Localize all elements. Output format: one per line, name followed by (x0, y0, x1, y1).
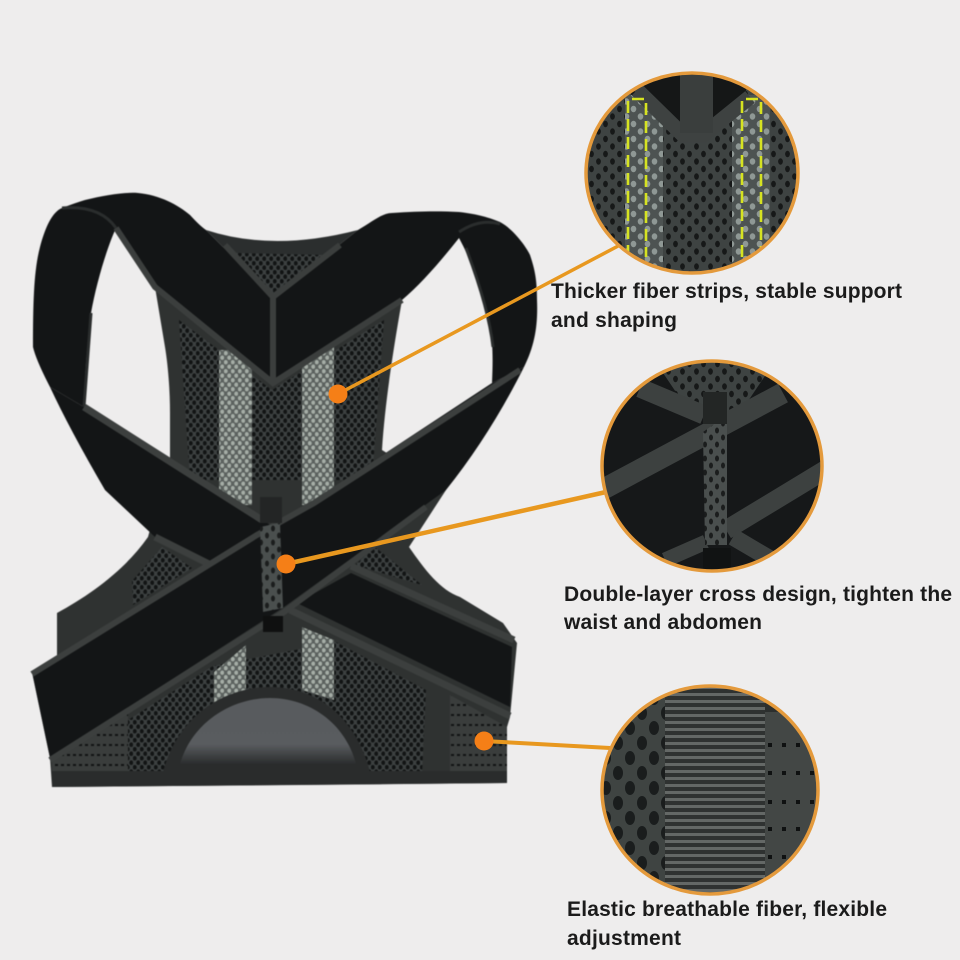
caption 1: Thicker fiber strips, stable support (551, 280, 902, 303)
caption 3: Elastic breathable fiber, flexible (567, 898, 887, 921)
shoulder trim (116, 228, 402, 383)
lower mesh (128, 642, 426, 774)
torso mesh (179, 320, 384, 480)
caption 3 (567, 898, 887, 950)
bottom hem (52, 771, 507, 787)
right elastic side panel (450, 695, 507, 775)
callout line 2 (286, 492, 606, 564)
cross band left upper (50, 387, 300, 562)
posture corrector vest (32, 193, 537, 787)
strap inner seam (62, 208, 500, 407)
callout line 3 (484, 741, 610, 748)
vest body (32, 287, 517, 787)
caption 2: waist and abdomen (563, 611, 762, 634)
detail circle 1: thicker fiber strips (580, 70, 805, 280)
band trim (84, 407, 514, 716)
left grey support strip (219, 350, 252, 505)
left side mesh (132, 547, 192, 605)
right shoulder strap and pad (273, 211, 537, 385)
band crossing trim (32, 370, 520, 760)
lumbar pad (163, 687, 370, 772)
center loop (260, 497, 283, 632)
neck mesh (206, 230, 358, 297)
caption 1 (551, 280, 902, 332)
left shoulder strap and pad (33, 193, 273, 407)
lower right grey strip (302, 627, 334, 700)
caption 3: adjustment (567, 927, 681, 950)
lower left grey strip (214, 645, 246, 712)
marker dot 1 (328, 384, 348, 404)
cross band right lower (297, 573, 512, 707)
cross band over (32, 367, 524, 758)
caption 2: Double-layer cross design, tighten the (564, 583, 952, 606)
caption 1: and shaping (551, 309, 677, 332)
detail circle 3: elastic fiber (598, 682, 823, 897)
right side mesh (355, 547, 422, 585)
left elastic side panel (52, 700, 128, 775)
marker dot 3 (474, 732, 494, 750)
caption 2 (563, 583, 952, 634)
detail circle 2: cross design (595, 355, 830, 580)
marker dot 2 (276, 554, 296, 574)
right grey support strip (302, 345, 334, 505)
callout line 1 (338, 245, 620, 394)
